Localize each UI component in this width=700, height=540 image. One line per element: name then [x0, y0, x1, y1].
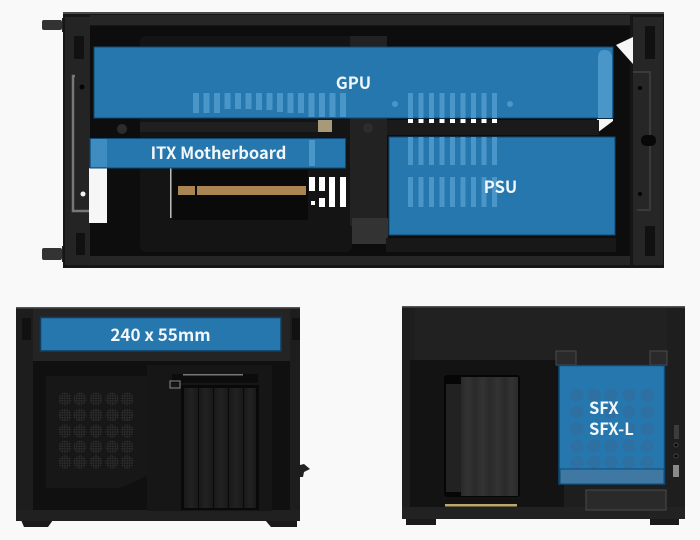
riser cable — [444, 375, 520, 497]
PSU bracket tabs — [556, 351, 667, 510]
GPU label: GPU — [336, 70, 371, 94]
white cut-outs — [89, 37, 633, 223]
SFX-L extension strip — [560, 469, 664, 484]
panel: top view case — [42, 12, 664, 268]
side latch — [300, 464, 310, 477]
SFX label: SFX — [589, 395, 619, 419]
panel: front view case, PSU bay — [402, 306, 685, 525]
case thumbscrews — [42, 18, 66, 262]
white vent dots — [408, 119, 497, 123]
vent holes — [570, 388, 654, 468]
right rail — [633, 17, 663, 265]
GPU outline — [94, 47, 613, 118]
PCIe riser connector — [172, 170, 308, 220]
case feet — [21, 520, 297, 527]
SFX-L label: SFX-L — [589, 416, 634, 440]
GPU vent slits — [193, 50, 612, 118]
SFX PSU outline — [559, 366, 664, 484]
GPU size callout — [40, 318, 281, 351]
size label: 240 x 55mm — [110, 321, 211, 346]
centre bracket — [147, 365, 272, 511]
case body — [402, 306, 685, 519]
left rail — [65, 17, 90, 265]
ITX Motherboard label: ITX Motherboard — [151, 140, 286, 164]
riser cable — [170, 374, 259, 510]
front I/O ports — [673, 425, 679, 477]
ITX Motherboard outline — [90, 138, 346, 168]
white rear slots — [170, 168, 346, 218]
PSU vent slits — [408, 137, 497, 207]
PSU outline — [389, 137, 615, 235]
case body — [16, 307, 300, 521]
case feet — [406, 518, 679, 525]
inner wall and bracket — [140, 36, 352, 252]
panel: rear view case, GPU clearance — [16, 307, 310, 527]
case body — [63, 12, 664, 268]
PSU label: PSU — [484, 174, 517, 198]
gold connector edge — [445, 504, 517, 506]
ventilated panel — [46, 376, 147, 488]
